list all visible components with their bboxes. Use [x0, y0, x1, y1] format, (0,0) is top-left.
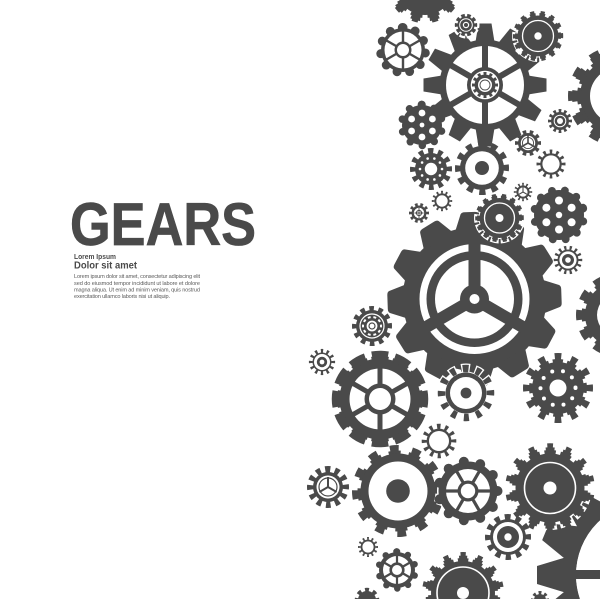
gear: main large three-spoke: [385, 209, 564, 389]
gear: holed left: [402, 104, 442, 146]
gear: holed right: [528, 184, 590, 246]
gear: concentric bottom: [488, 517, 528, 557]
gear: thin ring right: [539, 152, 563, 176]
gear: thin ring lower middle: [424, 426, 454, 456]
gear: top-right ring gear: [514, 12, 562, 60]
gear: tiny ring: [434, 192, 450, 210]
gear: right partial middle: [580, 276, 600, 354]
subheading: Dolor sit amet: Dolor sit amet: [74, 260, 137, 272]
body text block: magna aliqua. Ut enim ad minim veniam, quis nostrud: [74, 287, 200, 293]
body text block: exercitation ullamco laboris nisi ut aliquip.: [74, 294, 170, 300]
gear: right partial upper: [570, 48, 600, 144]
gear: tiny knobbed: [410, 204, 428, 222]
gear: large six-spoke: [424, 24, 546, 146]
gear: partial bottom-left: [357, 590, 377, 599]
gear: partial top: [390, 0, 460, 22]
subheading: Lorem Ipsum: Lorem Ipsum: [74, 252, 116, 261]
gear: small concentric: [556, 248, 580, 272]
gear: overlapping below main gear: [441, 368, 491, 418]
gear: small nested left of main: [354, 308, 390, 344]
heading: GEARS: GEARS: [70, 191, 256, 258]
gear: bottom right large partial: [537, 482, 600, 599]
body text block: [74, 274, 200, 300]
gear: overlapping ring above main gear: [477, 195, 522, 241]
gear: knobbed spoked top-left: [380, 28, 426, 72]
gear: small far-left: [311, 351, 333, 373]
gear: small three-spoke left lower: [310, 470, 346, 504]
body text block: Lorem ipsum dolor sit amet, consectetur adipiscing elit: [74, 274, 200, 280]
gear: large disc lower: [352, 445, 444, 537]
gear: bottom center pointed: [416, 546, 510, 599]
gear: tiny ring bottom-left: [360, 539, 376, 555]
gear: large hub center: [458, 144, 506, 192]
gear: small top ring: [456, 14, 476, 36]
gear: small three-spoke: [518, 132, 538, 154]
body text block: sed do eiusmod tempor incididunt ut labore et dolore: [74, 281, 200, 287]
gear: small right: [550, 111, 570, 131]
gear: dotted ring: [414, 152, 448, 186]
gear: upper-right pointed, overlapping: [499, 437, 600, 539]
gear: large six-spoke left: [335, 354, 425, 444]
gear: knobbed small bottom: [378, 552, 416, 588]
gear: dotted right lower: [527, 357, 589, 419]
gear: partial bottom-right small: [533, 593, 547, 599]
gear: tiny three-spoke: [515, 184, 531, 200]
gear: knobbed spoked lower right: [437, 460, 499, 522]
